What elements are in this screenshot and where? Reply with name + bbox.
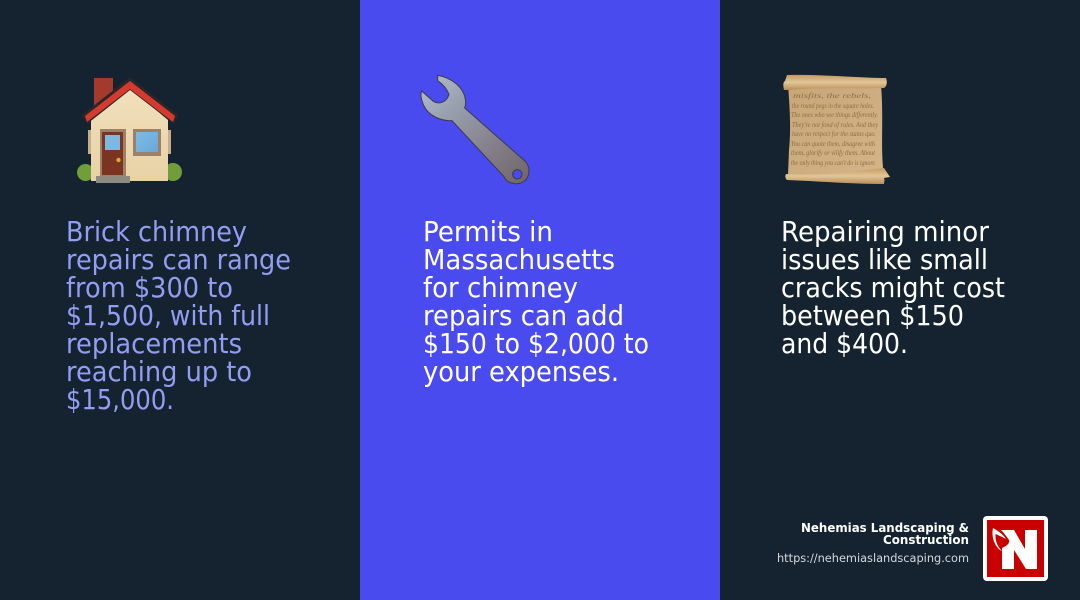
icon: scroll: have no respect for the status quo. <box>792 129 876 138</box>
icon: house <box>77 77 182 183</box>
text: brick chimney costs: reaching up to <box>66 357 252 388</box>
panel: brick chimney repair cost <box>0 0 360 600</box>
footer: company name and url <box>777 520 969 565</box>
text: minor repair costs: cracks might cost <box>781 273 1005 304</box>
footer: company name and url: Construction <box>883 532 969 547</box>
icon: scroll: the round pegs in the square holes. <box>792 101 874 110</box>
panel: permits in Massachusetts <box>360 0 720 600</box>
footer: company name and url: Nehemias Landscaping & <box>801 520 969 535</box>
text: permit costs: for chimney <box>423 273 578 304</box>
text: permit costs: Massachusetts <box>423 245 615 276</box>
text: minor repair costs: between $150 <box>781 301 964 332</box>
icon: wrench <box>421 75 529 184</box>
text: permit costs: repairs can add <box>423 301 624 332</box>
text: minor repair costs: Repairing minor <box>781 217 990 248</box>
text: brick chimney costs <box>66 217 291 416</box>
text: permit costs: Permits in <box>423 217 553 248</box>
icon: scroll: the only thing you can't do is ignore <box>791 158 876 167</box>
text: brick chimney costs: from $300 to <box>66 273 233 304</box>
panel: minor repairs <box>720 0 1080 600</box>
icon: scroll: misfits, the rebels, <box>793 91 871 100</box>
text: brick chimney costs: repairs can range <box>66 245 291 276</box>
text: minor repair costs: issues like small <box>781 245 988 276</box>
text: brick chimney costs: $15,000. <box>66 385 174 416</box>
text: brick chimney costs: Brick chimney <box>66 217 247 248</box>
text: permit costs: $150 to $2,000 to <box>423 329 649 360</box>
text: brick chimney costs: $1,500, with full <box>66 301 270 332</box>
footer: company name and url: https://nehemiaslandscaping.com <box>777 551 969 565</box>
text: brick chimney costs: replacements <box>66 329 242 360</box>
logo: Nehemias N with leaf <box>983 516 1048 581</box>
icon: scroll: The ones who see things differently. <box>791 110 878 119</box>
text: permit costs: your expenses. <box>423 357 619 388</box>
icon: scroll: They're not fond of rules. And they <box>792 120 879 129</box>
text: permit costs <box>423 217 649 388</box>
icon: scroll: them, glorify or vilify them. About <box>791 148 876 157</box>
text: minor repair costs: and $400. <box>781 329 908 360</box>
text: minor repair costs <box>781 217 1005 360</box>
icon: scroll <box>783 75 890 184</box>
icon: scroll: You can quote them, disagree with <box>791 139 875 148</box>
